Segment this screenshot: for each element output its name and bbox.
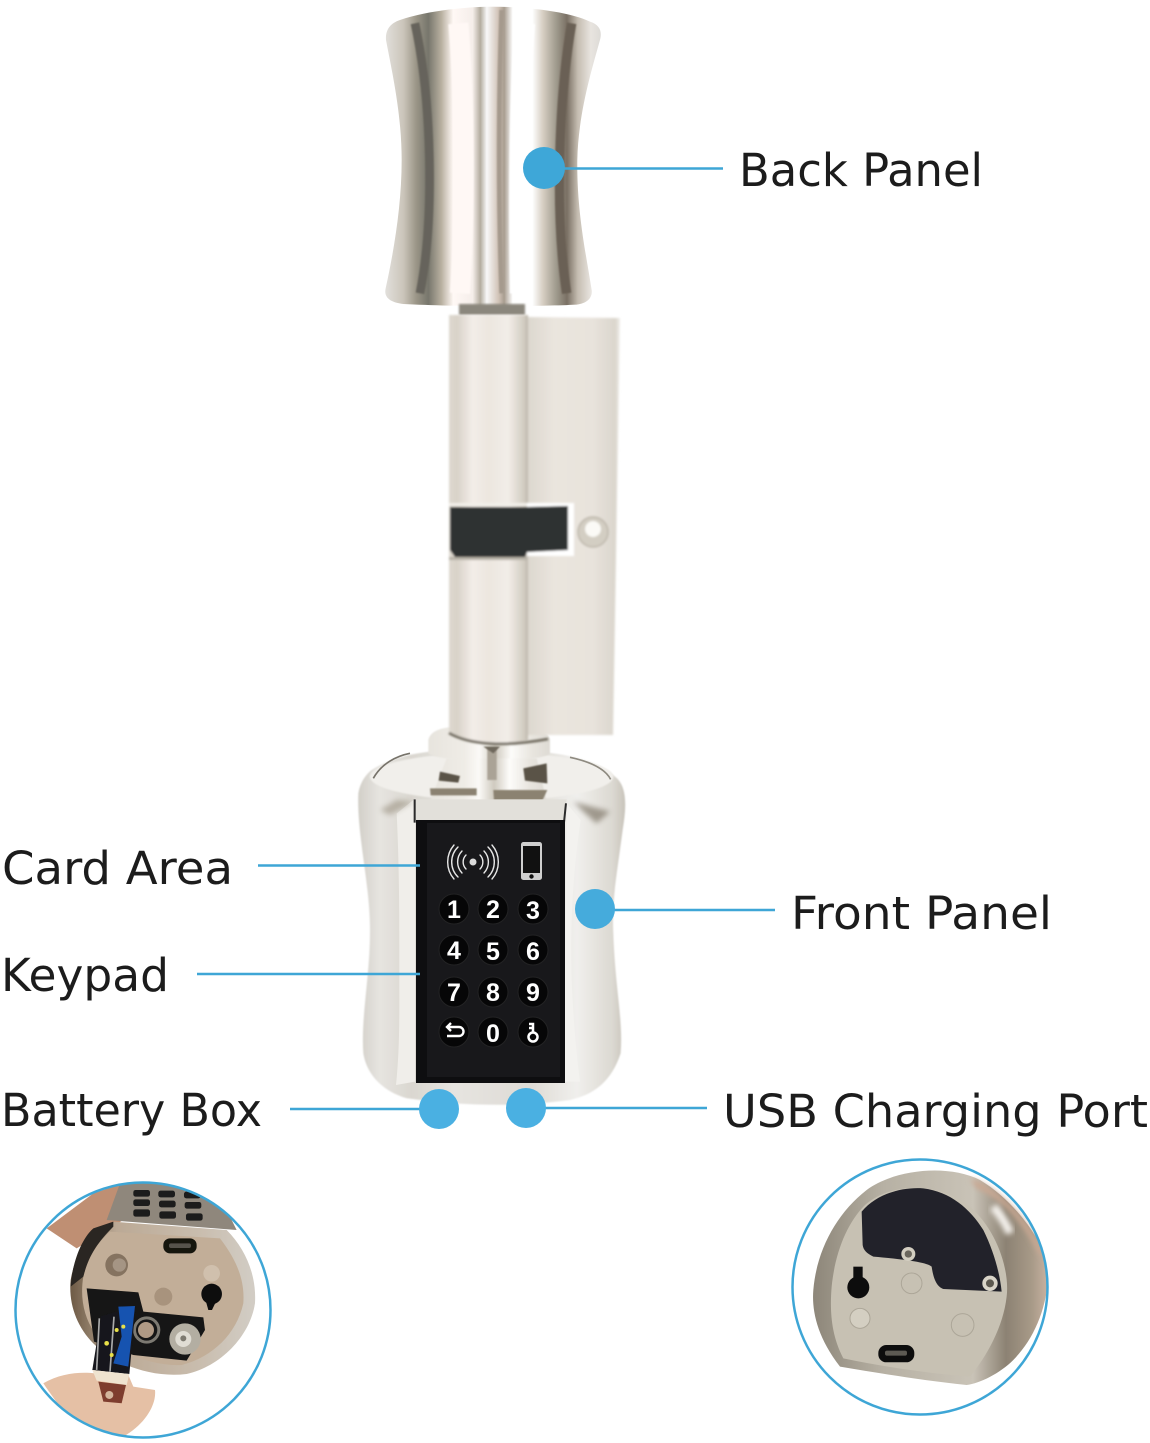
- product: lock cylinder: [358, 5, 625, 1105]
- lock cylinder body: [449, 315, 620, 744]
- callout: keypad: Keypad: [1, 949, 169, 1002]
- keypad buttons: 9: [526, 979, 540, 1007]
- inset: usb charging port close-up: [792, 1160, 1048, 1414]
- callout: card area: Card Area: [2, 842, 233, 895]
- icon: smartphone: [521, 842, 542, 880]
- keypad buttons: 2: [486, 896, 500, 924]
- callout: front panel: Front Panel: [791, 887, 1052, 940]
- inset: battery box close-up: [16, 1180, 270, 1438]
- callout: battery box: Battery Box: [1, 1084, 262, 1137]
- keypad buttons: 4: [447, 937, 461, 965]
- callout: front panel: [575, 887, 1052, 940]
- keypad buttons: [439, 894, 548, 1048]
- keypad buttons: 1: [447, 896, 461, 924]
- callout: usb charging port: [506, 1085, 1148, 1138]
- back panel knob: [383, 5, 603, 307]
- callout: back panel: Back Panel: [739, 144, 983, 197]
- icon: card reader waves: [448, 845, 498, 879]
- front panel housing: [358, 727, 625, 1105]
- keypad buttons: 0: [486, 1020, 500, 1048]
- neck between knob and cylinder: [459, 304, 525, 315]
- callout: battery box: [1, 1084, 459, 1137]
- keypad buttons: 8: [486, 979, 500, 1007]
- keypad buttons: 6: [526, 938, 540, 966]
- keypad: [416, 820, 565, 1083]
- collar ring: [428, 727, 550, 802]
- callout: usb charging port: USB Charging Port: [723, 1085, 1148, 1138]
- callout: back panel: [523, 144, 983, 197]
- keypad buttons: 3: [526, 897, 540, 925]
- keypad buttons: 5: [486, 938, 500, 966]
- keypad buttons: 7: [447, 979, 461, 1007]
